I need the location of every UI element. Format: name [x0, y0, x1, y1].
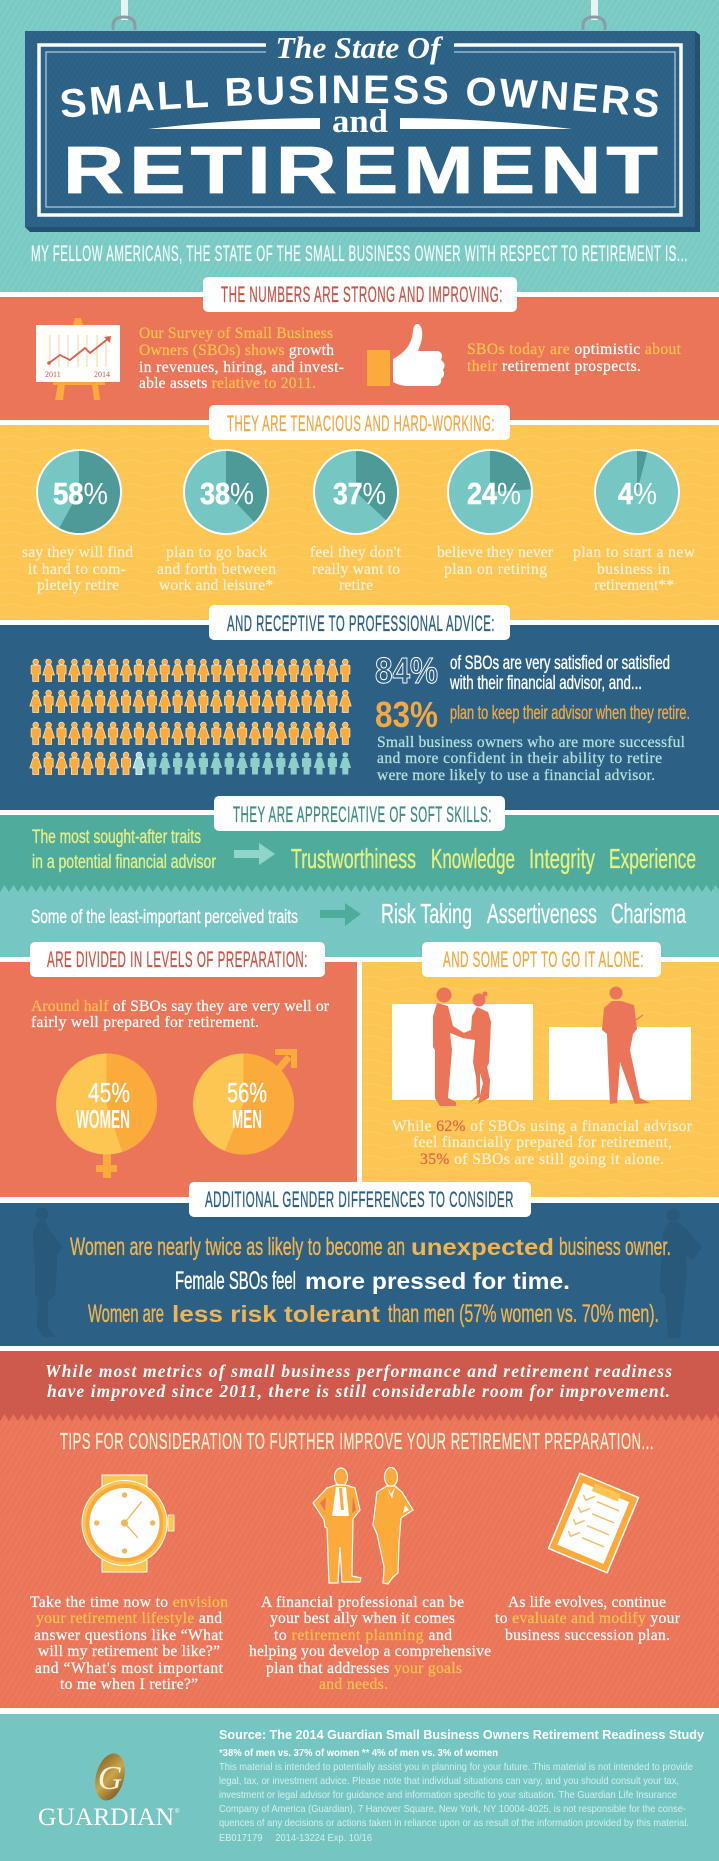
heading pill — [422, 942, 661, 977]
stat: 83 percent: 83% — [375, 694, 438, 735]
text: tip two: helping you develop a comprehensive — [249, 1643, 491, 1660]
caption: 38 percent: work and leisure* — [159, 577, 273, 594]
text: tip two: plan that addresses your goals — [266, 1660, 462, 1677]
pie: 58 percent: 58% — [53, 476, 108, 511]
caption: 37 percent: retire — [339, 577, 373, 594]
traits: most sought-after: Knowledge — [431, 843, 515, 874]
caption: 37 percent — [310, 544, 402, 594]
pie: 4 percent: 4% — [618, 476, 657, 511]
text: unexpected: unexpected — [411, 1234, 554, 1260]
text: most sought-after: The most sought-after traits — [32, 826, 201, 848]
pie: 37 percent: 37% — [333, 476, 386, 511]
silhouette: woman left — [33, 1208, 63, 1337]
caption: 37 percent: feel they don't — [310, 544, 402, 561]
title: and with swooshes — [148, 104, 572, 140]
caption: 4 percent: plan to start a new — [573, 544, 696, 561]
pie: 24 percent: 24% — [467, 476, 521, 511]
chart: women 45 percent: 45% — [88, 1077, 130, 1108]
title: Small Business Owners: SMALL BUSINESS OWNERS — [62, 75, 658, 118]
text: tip one: your retirement lifestyle and — [36, 1610, 222, 1627]
title: The State Of: The State Of — [276, 30, 443, 65]
text: tip three: to evaluate and modify your — [495, 1610, 681, 1627]
caption: 58 percent — [22, 544, 133, 594]
text: risk tolerant — [88, 1300, 659, 1328]
text: optimistic: SBOs today are optimistic about — [467, 341, 682, 358]
text: conclusion: While most metrics of small business performance and retirement readiness — [45, 1361, 672, 1381]
text: going it alone: While 62% of SBOs using a financial advisor — [392, 1118, 693, 1135]
text: pressed for time — [175, 1267, 570, 1295]
text: optimistic: their retirement prospects. — [467, 358, 641, 375]
panel: levels of preparation — [0, 942, 719, 1197]
caption: 58 percent: it hard to com- — [28, 561, 126, 578]
people grid: 84 of 100 — [30, 659, 351, 774]
chart: women 45 percent — [56, 1054, 157, 1178]
icon: business man — [313, 1468, 361, 1583]
text: going it alone — [392, 1118, 693, 1168]
text: small business owners: Small business owners who are more successful — [377, 734, 686, 751]
arrow: light — [234, 843, 275, 865]
icon: clipboard checklist — [548, 1472, 639, 1574]
text: survey growth: Owners (SBOs) shows growth — [139, 342, 334, 359]
text: around half: fairly well prepared for retirement. — [31, 1014, 259, 1031]
text: most sought-after — [32, 826, 216, 873]
illustration: man alone — [549, 986, 691, 1104]
logo: Guardian: G — [98, 1760, 122, 1797]
icon: left hanging hook — [113, 0, 135, 30]
silhouette: woman right — [660, 1208, 702, 1338]
text: small business owners — [377, 734, 686, 784]
caption: 4 percent — [573, 544, 696, 594]
text: tip two: your best ally when it comes — [270, 1610, 455, 1627]
caption: 58 percent: pletely retire — [37, 577, 119, 594]
text: small business owners: were more likely to use a financial advisor. — [377, 767, 655, 784]
icon: easel chart: 2014 — [94, 370, 110, 379]
text: tip two: to retirement planning and — [274, 1627, 452, 1644]
icon: right hanging hook — [583, 0, 605, 30]
text: survey growth: in revenues, hiring, and invest- — [139, 359, 344, 376]
text: pressed for time: Female SBOs feel — [175, 1267, 296, 1295]
icon: easel chart: 2011 — [45, 370, 61, 379]
heading pill — [209, 405, 510, 440]
logo: Guardian — [38, 1750, 180, 1831]
title: Retirement: RETIREMENT — [63, 133, 663, 208]
text: tip three — [495, 1594, 681, 1644]
text: optimistic — [467, 341, 682, 375]
pie: 38 percent — [184, 450, 268, 534]
title sign — [25, 30, 700, 232]
pie: 37 percent — [314, 450, 398, 534]
icon: business woman — [373, 1468, 413, 1584]
panel: gender differences — [0, 962, 719, 1346]
panel: footer — [0, 1708, 719, 1861]
text: risk tolerant: less risk tolerant — [172, 1301, 380, 1327]
text: conclusion — [45, 1361, 672, 1401]
pie: 38 percent: 38% — [200, 476, 254, 511]
text: tip three: business succession plan. — [505, 1627, 670, 1644]
heading pill — [189, 1182, 531, 1217]
traits: least-important: Assertiveness — [487, 898, 597, 929]
caption: 38 percent: plan to go back — [166, 544, 267, 561]
logo: Guardian: ® — [175, 1808, 180, 1815]
footnote: *38% of men vs. 37% of women ** 4% of men vs. 3% of women — [219, 1748, 498, 1759]
text: risk tolerant: Women are — [88, 1300, 164, 1328]
chart: men 56 percent: 56% — [227, 1077, 267, 1108]
panel: header background — [0, 0, 719, 292]
text: tip one: and “What's most important — [35, 1660, 224, 1677]
text: least-important: Some of the least-important perceived traits — [31, 906, 298, 928]
panel: tips — [0, 1414, 719, 1708]
panel: conclusion banner — [0, 1346, 719, 1421]
traits: least-important — [381, 898, 686, 929]
text: going it alone: 35% of SBOs are still going it alone. — [420, 1151, 664, 1168]
text: tip three: As life evolves, continue — [508, 1594, 666, 1611]
text: survey growth — [139, 325, 344, 392]
traits: most sought-after: Trustworthiness — [291, 843, 416, 874]
text: tip one — [30, 1594, 228, 1693]
text: survey growth: Our Survey of Small Business — [139, 325, 333, 342]
text: going it alone: feel financially prepared for retirement, — [413, 1134, 672, 1151]
disclaimer — [219, 1761, 693, 1844]
caption: 24 percent — [437, 544, 554, 578]
panel: numbers are strong — [0, 277, 719, 420]
text: unexpected: Women are nearly twice as likely to become an — [70, 1233, 405, 1261]
panel: soft skills — [0, 796, 719, 957]
logo: Guardian: GUARDIAN — [38, 1804, 174, 1831]
caption: 37 percent: really want to — [312, 561, 400, 578]
panel: go it alone — [362, 942, 719, 1197]
traits: most sought-after — [291, 843, 696, 874]
caption: 4 percent: retirement** — [594, 577, 674, 594]
heading pill — [203, 277, 517, 312]
text: tip two — [249, 1594, 491, 1693]
traits: least-important: Risk Taking — [381, 898, 472, 929]
caption: 24 percent: plan on retiring — [444, 561, 547, 578]
text: tip two: A financial professional can be — [261, 1594, 464, 1611]
pie: 58 percent — [37, 450, 121, 534]
heading pill — [209, 605, 510, 640]
text: tip one: will my retirement be like?” — [38, 1643, 220, 1660]
caption: 38 percent: and forth between — [157, 561, 276, 578]
text: pressed for time: more pressed for time. — [305, 1268, 570, 1294]
heading pill: ARE DIVIDED IN LEVELS OF PREPARATION: — [47, 947, 308, 972]
caption: 24 percent: believe they never — [437, 544, 554, 561]
icon: thumbs up — [367, 324, 445, 386]
heading pill — [214, 796, 505, 831]
icon: easel chart — [36, 318, 120, 400]
text: tip one: Take the time now to envision — [30, 1594, 228, 1611]
text: around half: Around half of SBOs say they are very well or — [31, 998, 330, 1015]
disclaimer: EB017179 2014-13224 Exp. 10/16 — [219, 1832, 372, 1844]
title: and with swooshes: and — [332, 104, 388, 140]
text: conclusion: have improved since 2011, there is still considerable room for improvement. — [47, 1381, 670, 1401]
panel: receptive to professional advice — [0, 605, 719, 810]
chart: men 56 percent: MEN — [232, 1104, 262, 1134]
pie: 4 percent — [595, 450, 679, 534]
arrow: dark — [320, 903, 361, 926]
text: tip one: answer questions like “What — [34, 1627, 224, 1644]
text: small business owners: and more confident in their ability to retire — [377, 750, 662, 767]
text: satisfied — [449, 652, 670, 694]
text: around half — [31, 998, 330, 1031]
pie: 24 percent — [448, 450, 532, 534]
caption: 4 percent: business in — [597, 561, 670, 578]
source heading: Source: The 2014 Guardian Small Business Owners Retirement Readiness Study — [219, 1727, 705, 1742]
caption: 58 percent: say they will find — [22, 544, 133, 561]
caption: 38 percent — [157, 544, 276, 594]
text: tip one: to me when I retire?” — [60, 1676, 198, 1693]
stat: 84 percent: 84% — [375, 650, 438, 691]
text: survey growth: able assets relative to 2011. — [139, 375, 316, 392]
text: tip two: and needs. — [319, 1676, 388, 1693]
icon: watch — [82, 1475, 174, 1572]
text: most sought-after: in a potential financial advisor — [32, 851, 216, 873]
disclaimer: investment or legal advisor for guidance and information specific to your situation. The Guardian Life Insurance — [219, 1789, 677, 1801]
chart: women 45 percent: WOMEN — [76, 1104, 130, 1134]
chart: men 56 percent — [193, 1049, 297, 1154]
panel: tenacious and hard-working — [0, 405, 719, 620]
heading pill — [30, 942, 325, 977]
heading pill: THEY ARE APPRECIATIVE OF SOFT SKILLS: — [233, 802, 492, 827]
traits: most sought-after: Integrity — [529, 843, 595, 874]
illustration: handshake — [392, 988, 533, 1106]
